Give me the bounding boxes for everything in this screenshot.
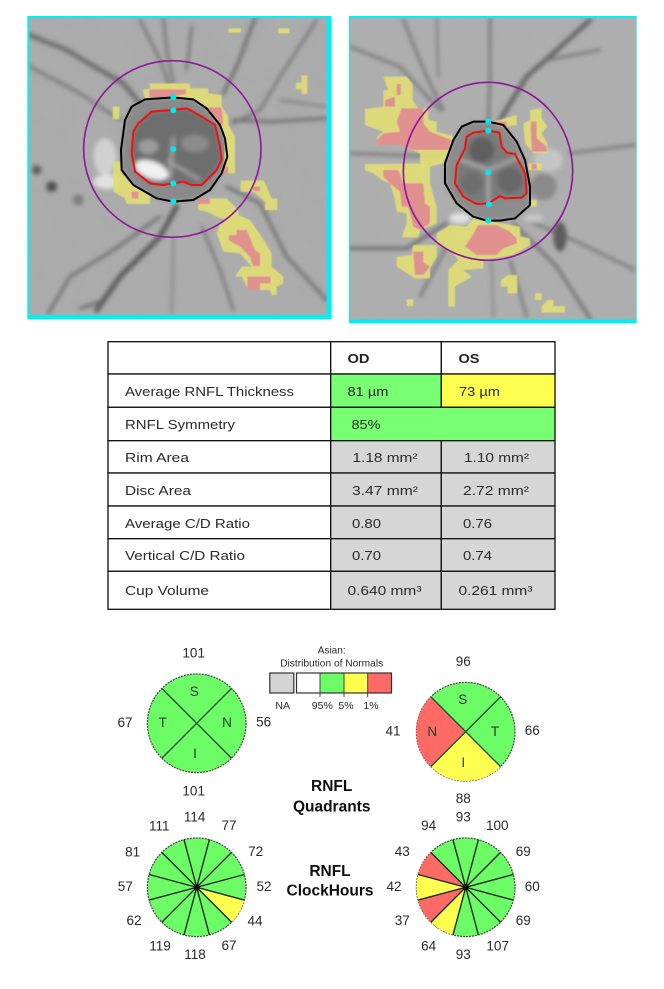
row: RNFL symmetry: RNFL Symmetry bbox=[125, 417, 236, 432]
OS clock hours pie chart: 94 bbox=[421, 818, 437, 833]
OS quadrant pie chart bbox=[385, 654, 540, 806]
header OD: OD bbox=[348, 351, 370, 366]
cyan marker points OD bbox=[170, 94, 176, 204]
red cup contour OD bbox=[132, 108, 222, 185]
OD clock hours pie chart: 118 bbox=[184, 947, 206, 962]
legend: distribution of normals: 95% bbox=[312, 700, 333, 712]
row: rim area: 1.18 mm² bbox=[352, 450, 418, 465]
red cup contour OS bbox=[455, 131, 527, 204]
header OS: OS bbox=[458, 351, 480, 366]
OD clock hours pie chart: 57 bbox=[118, 879, 133, 894]
glaucoma probability patches OD bbox=[113, 28, 307, 295]
OS quadrant pie chart: 41 bbox=[385, 724, 401, 738]
black disc contour OD bbox=[121, 97, 227, 202]
row: average C/D ratio: 0.80 bbox=[352, 516, 381, 531]
OS clock hours pie chart: 100 bbox=[486, 818, 509, 833]
OD clock hours pie chart: 44 bbox=[247, 914, 263, 928]
OS clock hours pie chart: 69 bbox=[516, 844, 531, 859]
OS clock hours pie chart: 43 bbox=[395, 844, 410, 859]
OS clock hours pie chart: 60 bbox=[525, 879, 540, 894]
OS quadrant pie chart: I bbox=[461, 755, 465, 770]
legend: distribution of normals bbox=[270, 644, 392, 712]
OD clock hours pie chart: 72 bbox=[248, 844, 263, 859]
OS clock hours pie chart bbox=[386, 810, 540, 962]
OS quadrant pie chart: S bbox=[458, 692, 467, 707]
OS fundus scan image bbox=[349, 16, 637, 323]
legend: distribution of normals: Asian: bbox=[318, 644, 346, 656]
purple measurement circle OD bbox=[84, 61, 261, 237]
OD clock hours pie chart: 77 bbox=[221, 818, 237, 833]
OS clock hours pie chart: 93 bbox=[456, 810, 471, 824]
OS clock hours pie chart: 42 bbox=[386, 879, 402, 894]
row: RNFL symmetry bbox=[108, 407, 555, 441]
OD clock hours pie chart: 52 bbox=[256, 879, 272, 894]
OD fundus scan image bbox=[27, 16, 332, 319]
OD clock hours pie chart: 119 bbox=[149, 938, 171, 954]
OS quadrant pie chart: 66 bbox=[525, 723, 540, 738]
OS clock hours pie chart: 64 bbox=[421, 938, 437, 954]
OS quadrant pie chart: 88 bbox=[456, 791, 471, 806]
row: rim area: 1.10 mm² bbox=[464, 450, 530, 465]
row: rim area: Rim Area bbox=[125, 450, 190, 465]
OD quadrant pie chart bbox=[117, 646, 271, 798]
row: average C/D ratio: Average C/D Ratio bbox=[125, 516, 250, 531]
OD quadrant pie chart: 67 bbox=[117, 715, 133, 730]
row: vertical C/D ratio: 0.70 bbox=[352, 548, 381, 563]
OD quadrant pie chart: N bbox=[222, 715, 232, 730]
OS quadrant pie chart: 96 bbox=[456, 654, 471, 669]
cyan marker points OS bbox=[485, 119, 492, 224]
row: average C/D ratio bbox=[108, 506, 555, 539]
legend: distribution of normals: NA bbox=[275, 700, 290, 712]
row: cup volume bbox=[108, 571, 555, 609]
black disc contour OS bbox=[445, 122, 530, 221]
heading: RNFL ClockHours: RNFL bbox=[309, 863, 351, 880]
row: vertical C/D ratio: 0.74 bbox=[463, 548, 492, 563]
legend: distribution of normals: 1% bbox=[363, 700, 379, 712]
OS clock hours pie chart: 107 bbox=[486, 938, 509, 954]
row: average RNFL thickness: 73 µm bbox=[459, 384, 500, 399]
OD quadrant pie chart: 101 bbox=[182, 646, 205, 660]
OS clock hours pie chart: 93 bbox=[456, 947, 471, 962]
purple measurement circle OS bbox=[403, 82, 573, 260]
row: rim area bbox=[108, 441, 555, 473]
row: disc area: 2.72 mm² bbox=[463, 483, 530, 498]
row: average C/D ratio: 0.76 bbox=[463, 516, 492, 531]
OD quadrant pie chart: 56 bbox=[256, 714, 271, 730]
RNFL summary table bbox=[108, 342, 555, 609]
glaucoma probability patches OS bbox=[365, 77, 565, 313]
row: vertical C/D ratio bbox=[108, 539, 555, 571]
row: average RNFL thickness: Average RNFL Thickness bbox=[125, 384, 295, 399]
heading: RNFL Quadrants: RNFL bbox=[311, 778, 352, 795]
OD clock hours pie chart: 62 bbox=[126, 913, 142, 928]
OS clock hours pie chart: 69 bbox=[516, 913, 531, 928]
OS quadrant pie chart: N bbox=[427, 724, 437, 739]
OD clock hours pie chart bbox=[118, 810, 272, 962]
row: cup volume: 0.261 mm³ bbox=[458, 583, 533, 598]
row: average RNFL thickness bbox=[108, 374, 555, 407]
row: disc area: Disc Area bbox=[125, 483, 192, 498]
row: disc area: 3.47 mm² bbox=[352, 483, 419, 498]
OS clock hours pie chart: 37 bbox=[395, 913, 410, 928]
OD clock hours pie chart: 67 bbox=[221, 938, 237, 953]
row: disc area bbox=[108, 473, 555, 506]
OS quadrant pie chart: T bbox=[491, 724, 499, 739]
row: RNFL symmetry: 85% bbox=[352, 417, 381, 432]
OD quadrant pie chart: T bbox=[159, 715, 167, 730]
row: average RNFL thickness: 81 µm bbox=[348, 384, 388, 399]
OD quadrant pie chart: I bbox=[193, 746, 197, 761]
row: vertical C/D ratio: Vertical C/D Ratio bbox=[125, 548, 245, 563]
legend: distribution of normals: 5% bbox=[338, 700, 354, 712]
OD quadrant pie chart: 101 bbox=[182, 784, 205, 798]
legend: distribution of normals: Distribution of Normals bbox=[280, 658, 383, 670]
OD clock hours pie chart: 114 bbox=[184, 810, 206, 824]
heading: RNFL Quadrants: Quadrants bbox=[293, 798, 370, 816]
row: cup volume: 0.640 mm³ bbox=[348, 583, 422, 598]
OD quadrant pie chart: S bbox=[190, 684, 199, 699]
row: cup volume: Cup Volume bbox=[125, 583, 209, 598]
heading: RNFL ClockHours: ClockHours bbox=[286, 882, 374, 900]
OD clock hours pie chart: 81 bbox=[125, 844, 140, 860]
OD clock hours pie chart: 111 bbox=[149, 818, 170, 834]
